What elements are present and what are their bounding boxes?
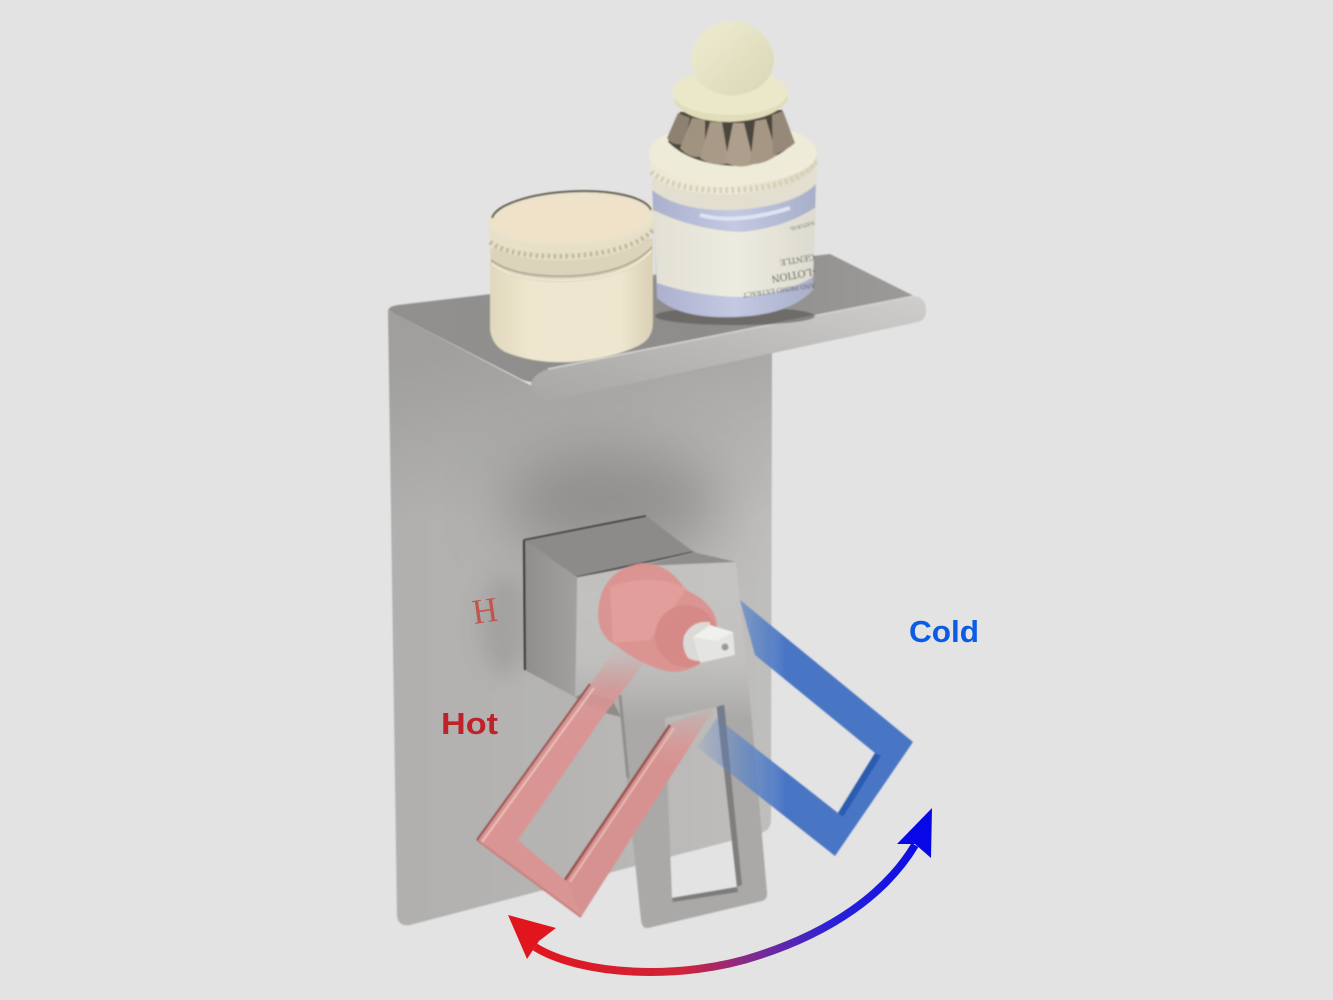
bottom band — [477, 840, 581, 917]
cube underside arc — [575, 680, 622, 717]
jar label with upside-down text: AND PRIMO EXTRACT — [742, 281, 816, 299]
label: Hot: Hot — [441, 706, 498, 741]
infographic canvas — [387, 20, 977, 976]
jar label with upside-down text: NATURAL — [788, 219, 815, 232]
slot wall over blue band — [717, 705, 730, 770]
handle inner wall — [838, 753, 881, 817]
left band — [477, 650, 650, 840]
jar label with upside-down text — [653, 207, 817, 299]
jar: cream — [487, 187, 657, 362]
jar label with upside-down text: GENTLE — [779, 252, 815, 268]
shelf front lip — [531, 296, 926, 402]
jar neck ring — [652, 170, 817, 210]
jar neck — [490, 238, 653, 282]
cube left face — [524, 540, 578, 697]
jar glass — [652, 178, 816, 317]
label: H mark: H — [470, 590, 500, 632]
cube top face — [524, 516, 695, 578]
handle body with slot — [576, 562, 767, 928]
handle top strip — [643, 552, 736, 566]
jar lid — [488, 208, 656, 260]
jar: lotion with brush — [649, 21, 817, 325]
bristles — [667, 110, 795, 167]
pink hot handle — [477, 650, 715, 917]
jar label with upside-down text: -LOTION — [771, 265, 817, 285]
motion arc arrow — [508, 808, 932, 972]
shelf — [388, 254, 926, 402]
right band — [565, 707, 715, 917]
wall plate — [380, 290, 780, 925]
jar body — [490, 250, 653, 362]
pink cartridge overlay — [598, 563, 717, 672]
jar shadow — [655, 307, 815, 325]
brush collar — [673, 90, 788, 122]
valve stem — [683, 622, 735, 663]
blue cold handle — [697, 600, 913, 856]
centre grey handle — [576, 552, 767, 928]
shelf top surface — [388, 254, 916, 382]
slot walls — [717, 705, 742, 887]
jar screw lid — [649, 150, 817, 194]
label: Cold: Cold — [909, 614, 979, 649]
arrowhead: cold — [897, 808, 932, 858]
brush knob — [691, 21, 774, 96]
valve body cube — [524, 516, 695, 717]
arrowhead: hot — [508, 915, 556, 959]
